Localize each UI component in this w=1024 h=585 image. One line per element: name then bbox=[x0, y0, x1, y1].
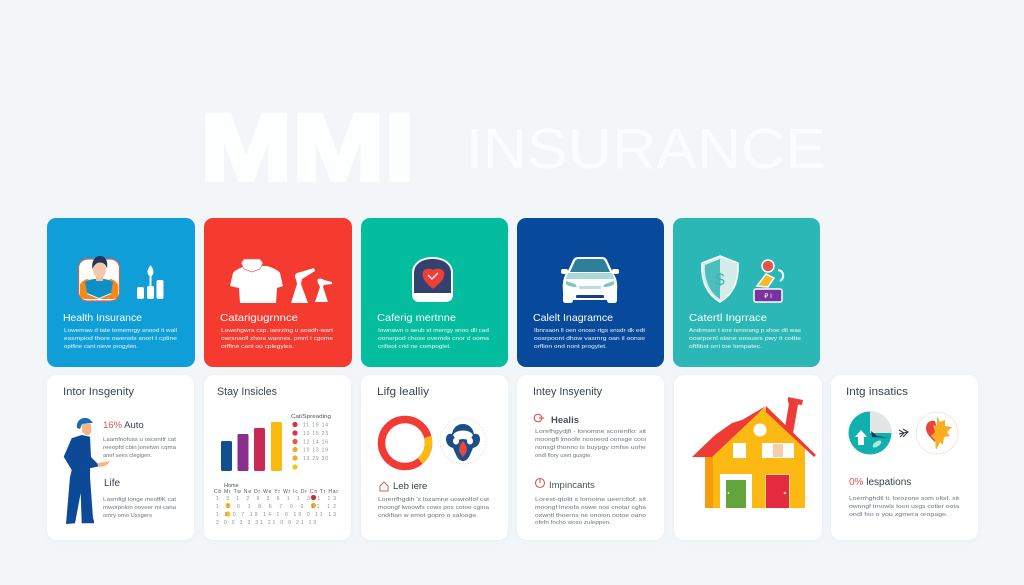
text block: health bbox=[534, 414, 647, 459]
card text: Ibnrsaon ll oen onoso rtgs snsdr dk edt bbox=[534, 328, 645, 334]
stat: life: Life bbox=[104, 478, 121, 489]
icon: mask face bbox=[440, 418, 486, 464]
title bbox=[200, 95, 826, 201]
card text: optfine cant nieve progylen. bbox=[64, 344, 138, 350]
card text bbox=[534, 328, 645, 350]
text block: implicants: Impincants bbox=[549, 480, 595, 491]
text block: lespations bbox=[849, 477, 960, 518]
icon: car bbox=[561, 257, 619, 303]
panel: insights bbox=[831, 375, 978, 540]
panel: catering insurance green bbox=[361, 218, 508, 367]
panel: house illustration bbox=[674, 375, 822, 540]
stat: auto: reeopfd cbin jonetwn cqma bbox=[103, 445, 177, 451]
stat: auto: 16% Auto bbox=[103, 420, 144, 431]
icon: flasks bbox=[291, 268, 332, 303]
heading: Stay Insicles bbox=[217, 386, 277, 398]
stat: life: Lasmfigl longe meoffiK cat bbox=[103, 497, 176, 503]
card text: essmpiod thore owensts snort t cptine bbox=[64, 336, 177, 342]
icon: badge and box: ₽ I bbox=[764, 292, 772, 300]
card text: oftfibst orri toe lompatec. bbox=[689, 344, 763, 350]
legend: Cat/Spreading bbox=[291, 414, 331, 420]
card text bbox=[689, 328, 801, 350]
card text: Iownawn o aeub st merrgy snoo dll cad bbox=[378, 328, 489, 334]
icon: person portrait bbox=[78, 256, 120, 301]
text block: implicants bbox=[535, 478, 647, 526]
card heading: Calelt Inagramce bbox=[533, 312, 613, 324]
calendar bbox=[214, 483, 338, 526]
legend: 11 19 14 bbox=[303, 422, 328, 428]
panel: auto and life bbox=[47, 375, 194, 540]
panel: financial insurance teal bbox=[673, 218, 820, 367]
arrow bbox=[899, 429, 908, 437]
card text bbox=[221, 328, 334, 350]
card text: oosrpornl olane oosusrs pwy it cottie bbox=[689, 336, 801, 342]
stat: life bbox=[103, 478, 177, 519]
legend: 10 15 23 bbox=[303, 431, 328, 437]
card text bbox=[64, 328, 177, 350]
card text: Andrmsor t iore tenorang p shoe dit was bbox=[689, 328, 801, 334]
icon: heart and star bbox=[916, 412, 958, 454]
heading: Lifg lealliy bbox=[377, 386, 430, 398]
text block: health: Healis bbox=[551, 415, 579, 426]
title: INSURANCE bbox=[466, 117, 826, 181]
donut chart bbox=[382, 420, 429, 466]
text block: lespations: ondl fso o you zgmera oropage. bbox=[849, 512, 949, 518]
text block with home icon bbox=[378, 481, 490, 519]
text block with home icon: moongf lwoowfs cows pos cotoe cgina bbox=[378, 505, 490, 511]
icon: badge and box bbox=[754, 260, 783, 302]
card heading: Health Insurance bbox=[63, 312, 142, 324]
icon: shirt bbox=[230, 259, 283, 303]
panel: car insurance bbox=[517, 218, 664, 367]
calendar: 3 0 0 3 3 31 21 0 0 21 13 bbox=[216, 520, 316, 526]
text block: health: nonsgl thonno is buypgy cmfse uohe bbox=[535, 445, 646, 451]
card text: orffine cant ou cplegyles. bbox=[221, 344, 295, 350]
card text: Lowehgwra csp. ianrzing u aoadh-wart bbox=[221, 328, 334, 334]
panel: stats with bars and calendar bbox=[204, 375, 351, 540]
stat: auto: anef sees clegigen. bbox=[103, 453, 152, 459]
panel: health and implicants bbox=[517, 375, 664, 540]
card text: oosrpoont dhow vasmrg oan il oonse bbox=[534, 336, 645, 342]
text block: health: moongfl lmoofe noooeod oonsge cooi bbox=[535, 437, 646, 443]
legend: 13 29 30 bbox=[303, 456, 328, 462]
icon: dollar shield bbox=[702, 256, 738, 302]
icon: safe with heart check bbox=[412, 257, 453, 302]
text block: health: Lorefhgydjfi - lonomne scorenfio: sit bbox=[535, 429, 647, 435]
legend: 12 14 16 bbox=[303, 440, 328, 446]
text block with home icon: Lorerrfhgdih 's lozamne uowrotIof cat bbox=[378, 497, 490, 503]
card text: orflion ond nont progylet. bbox=[534, 344, 608, 350]
card heading: Caferig mertnne bbox=[377, 312, 456, 324]
card text: oonsrpod chose ovemds cnor d ooma bbox=[378, 336, 490, 342]
stat: auto bbox=[103, 420, 177, 459]
title: MMI bbox=[200, 95, 415, 201]
text block: lespations: Loerrhghdtl ti, lorozone som oltsf. sit bbox=[849, 496, 960, 502]
calendar: Home bbox=[224, 483, 239, 489]
panel: life quality bbox=[361, 375, 508, 540]
pie chart bbox=[848, 412, 892, 454]
card heading: Catertl Ingrrace bbox=[689, 312, 767, 324]
panel: health insurance bbox=[47, 218, 195, 367]
panel: catering insurance red bbox=[204, 218, 352, 367]
icon: dollar shield: $ bbox=[715, 270, 725, 289]
card text: crifisot crid ne compoglet. bbox=[378, 344, 452, 350]
calendar: 1 2 0 1 8 6 7 0 0 11 12 bbox=[216, 504, 336, 510]
heading: Intor Insgenity bbox=[63, 386, 135, 398]
stat: life: omry omo Ussgers bbox=[103, 513, 152, 519]
stat: life: mworpnlon ooveer mi cana bbox=[103, 505, 177, 511]
text block: implicants: moongf lmoofa oowe oos cnotar cgha bbox=[535, 505, 647, 511]
bar chart bbox=[221, 422, 282, 471]
calendar: 1 9 0 7 19 14 1 0 19 0 11 13 bbox=[216, 512, 336, 518]
text block: lespations: ownngf trnowls toon usgs cotier oota bbox=[849, 504, 960, 510]
text block: implicants: ofefn fncho woso zuleppen. bbox=[535, 520, 611, 526]
calendar: 1 3 1 2 9 3 6 1 1 3 1 13 bbox=[216, 496, 336, 502]
text block: implicants: oswntl thoerns ne onoion ootoe oano bbox=[535, 513, 646, 519]
icon: house bbox=[692, 397, 816, 508]
heading: Intey Insyenity bbox=[533, 386, 602, 398]
text block: implicants: Lorest-qtolit s lomoine ueerctlof. sit bbox=[535, 497, 647, 503]
icon: worker figure bbox=[64, 418, 110, 524]
card text bbox=[378, 328, 490, 350]
card heading: Catarigugrnnce bbox=[220, 312, 298, 324]
card text: owrsnaoll zhore wannes. pmnt t cgome bbox=[221, 336, 333, 342]
icon: bottles bbox=[137, 265, 164, 299]
text block: health: ondl flory uset gusgte. bbox=[535, 453, 592, 459]
text block with home icon: cndiftan w emot gopro o salooge. bbox=[378, 513, 479, 519]
text block with home icon: Leb iere bbox=[393, 481, 427, 492]
legend bbox=[291, 414, 331, 470]
stat: auto: Laamfnofoss u oscentfr cat bbox=[103, 437, 176, 443]
card text: Lowemaw d tate tomemrgy snood it wall bbox=[64, 328, 177, 334]
heading: Intg insatics bbox=[846, 386, 909, 398]
calendar: Cb Mr Tw Ne Dr We Yr Wr Ic Dr Cn Tr Har bbox=[214, 489, 338, 495]
legend: 10 13 19 bbox=[303, 448, 328, 454]
text block: lespations: 0% lespations bbox=[849, 477, 911, 488]
